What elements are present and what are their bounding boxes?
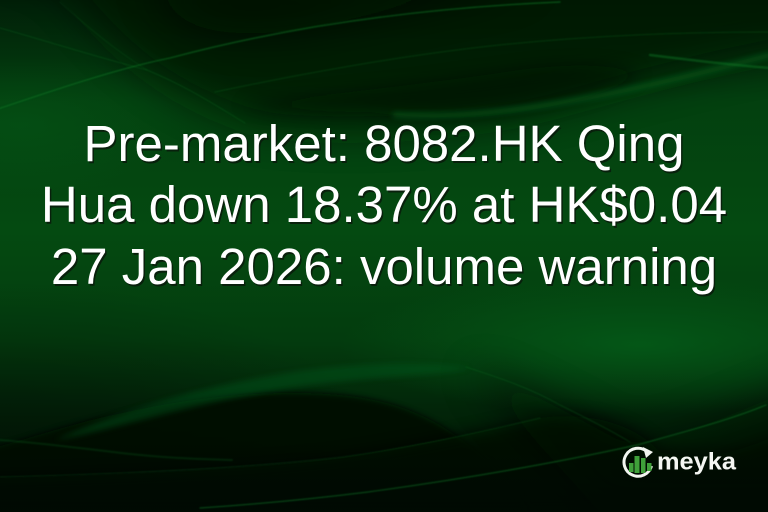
headline lines: Pre-market: 8082.HK Qing <box>84 115 684 172</box>
logo icon: ring with green bars <box>624 447 653 476</box>
bottom dark swoosh <box>0 393 530 512</box>
headline lines: Hua down 18.37% at HK$0.04 <box>41 176 727 233</box>
headline shadow: Hua down 18.37% at HK$0.04 <box>42 178 729 235</box>
headline shadow <box>42 117 729 297</box>
top dark swoosh <box>0 0 768 130</box>
logo wordmark: meyka <box>657 448 737 476</box>
headline shadow: Pre-market: 8082.HK Qing <box>85 117 686 174</box>
soft green band above the hump <box>55 364 470 440</box>
headline lines: 27 Jan 2026: volume warning <box>51 238 717 295</box>
headline shadow: 27 Jan 2026: volume warning <box>52 240 719 297</box>
headline lines <box>41 115 727 295</box>
